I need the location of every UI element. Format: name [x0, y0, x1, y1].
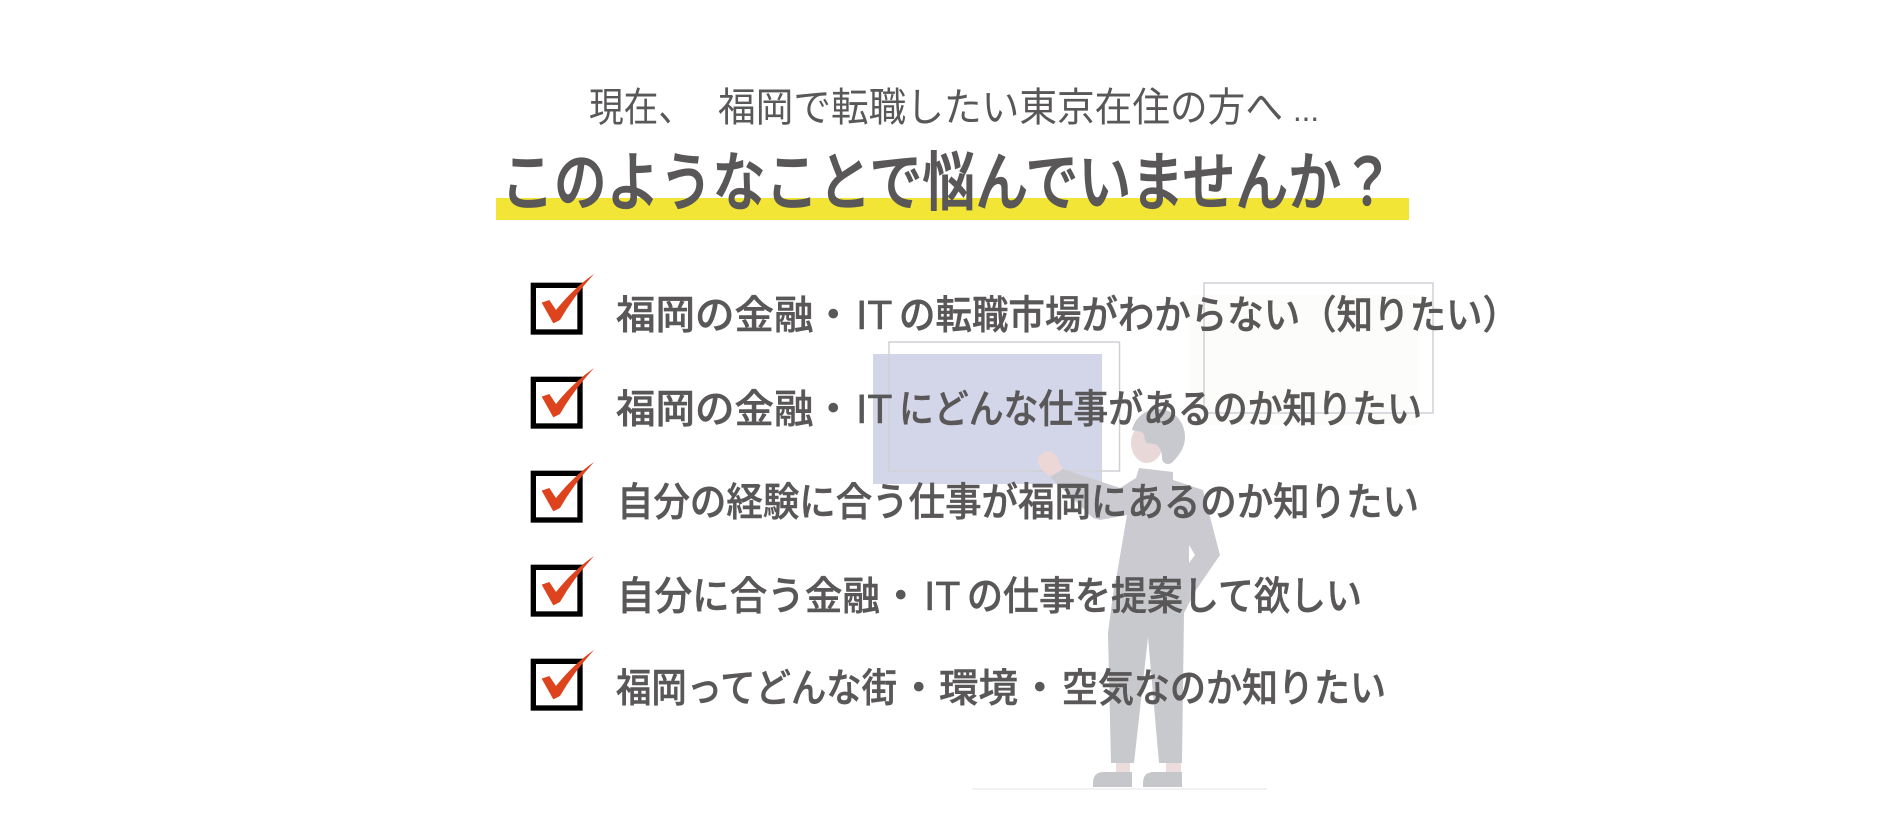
hand [1038, 451, 1063, 477]
list item 2 [533, 368, 1422, 432]
checkbox icon [533, 462, 594, 520]
list item 5 [533, 650, 1386, 711]
item text: 自分に合う金融 [617, 575, 880, 619]
board: outlined rectangle right [1204, 283, 1433, 413]
item text [617, 573, 1362, 619]
item text: ・ [881, 575, 920, 619]
board: outlined rectangle left [889, 342, 1120, 471]
jacket and raised arm [1050, 468, 1220, 613]
item text: ・ [1020, 667, 1060, 711]
subtitle: ... [1293, 92, 1319, 128]
gap between arm and waist [1189, 545, 1195, 563]
subtitle: 現在、 [589, 86, 693, 130]
list item 1: の転職市場がわからない（知りたい） [899, 294, 1519, 338]
item text: 福岡の金融 [616, 294, 814, 338]
list item 3 [533, 462, 1419, 525]
subtitle: 福岡で転職したい東京在住の方へ [718, 86, 1283, 130]
item text: 福岡の金融 [616, 388, 814, 432]
illustration: man looking at boards [873, 283, 1433, 790]
trousers [1108, 580, 1190, 763]
item text: の仕事を提案して欲しい [967, 575, 1362, 619]
item text: IT [924, 573, 960, 619]
item text: IT [856, 386, 892, 432]
ankles [1116, 763, 1181, 773]
board: blue filled rectangle [873, 354, 1102, 484]
checkbox icon [533, 650, 594, 708]
list item 4 [533, 556, 1362, 619]
board: pale filled rectangle [1190, 295, 1418, 425]
shoes [1093, 772, 1182, 787]
heading highlight bar [496, 198, 1409, 220]
checkbox icon [533, 368, 594, 426]
item text: 福岡ってどんな街 [616, 667, 897, 711]
item text: ・ [814, 294, 853, 338]
item text: ・ [899, 667, 938, 711]
hair [1132, 409, 1185, 464]
item text: 環境 [939, 667, 1018, 711]
heading: このようなことで悩んでいませんか？ [501, 147, 1394, 219]
list item 1 [533, 274, 1519, 338]
item text: IT [856, 292, 892, 338]
item text: 自分の経験に合う仕事が福岡にあるのか知りたい [617, 481, 1419, 525]
item text: 空気なのか知りたい [1062, 667, 1386, 711]
item text [616, 667, 1386, 711]
checkbox icon [533, 556, 594, 614]
item text: ・ [814, 388, 853, 432]
person [1038, 409, 1220, 787]
checkbox icon [533, 274, 594, 332]
list item 2: にどんな仕事があるのか知りたい [899, 388, 1422, 432]
floor line [972, 788, 1267, 790]
face [1131, 423, 1163, 463]
